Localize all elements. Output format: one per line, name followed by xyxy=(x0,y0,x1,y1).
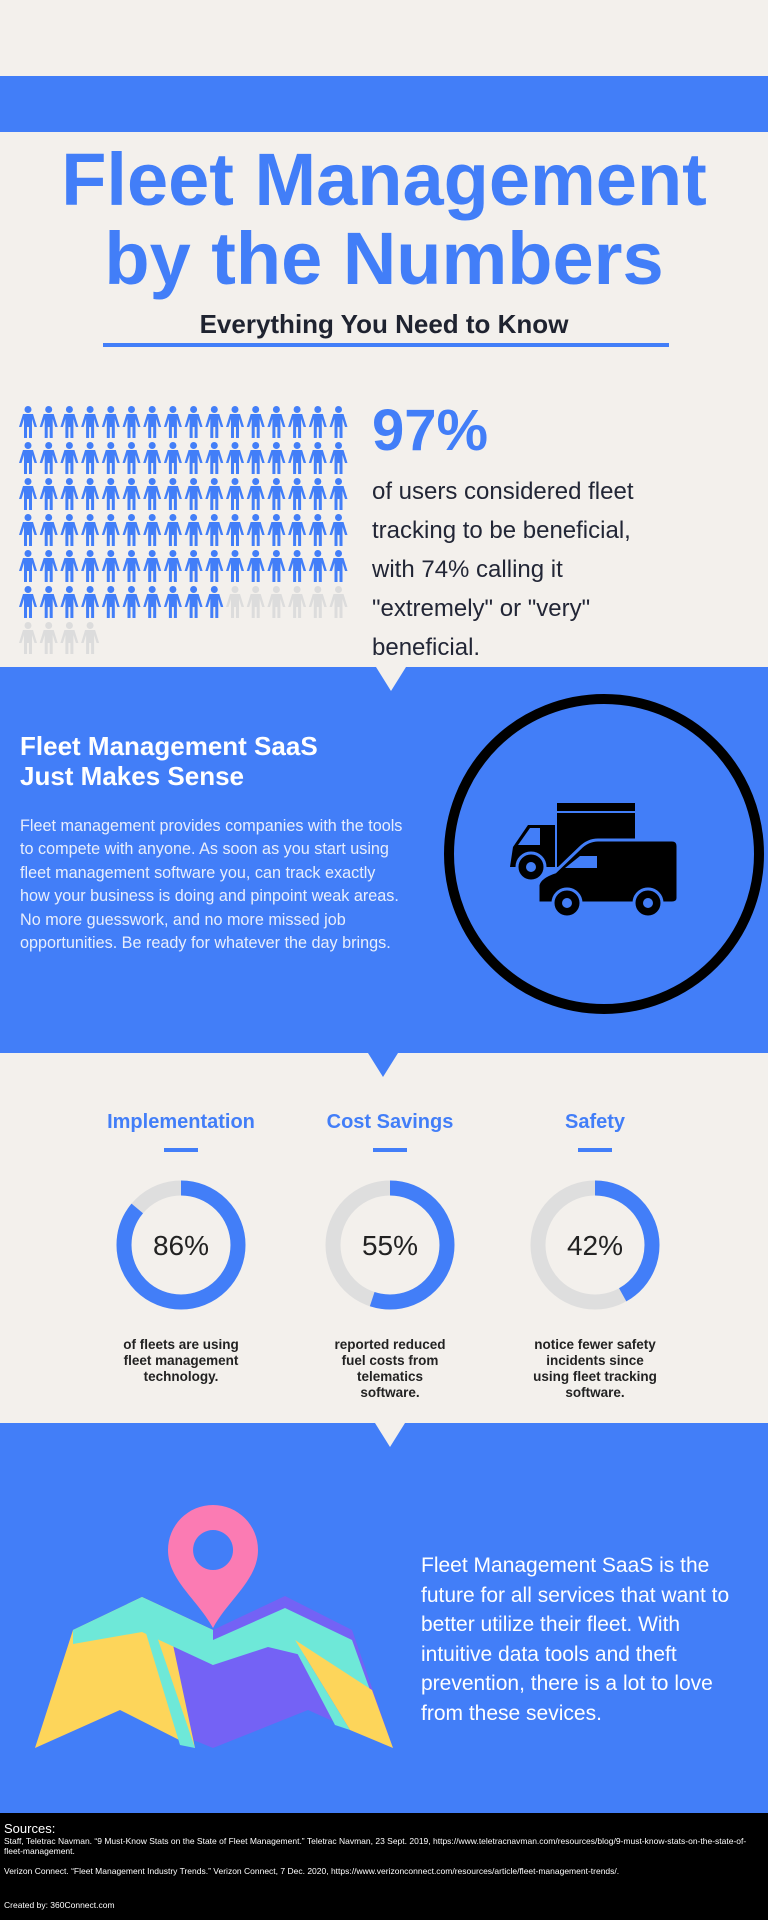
stat: implementation: Implementation xyxy=(107,1111,255,1133)
notch xyxy=(375,1423,405,1447)
subtitle: Everything You Need to Know xyxy=(200,309,568,339)
title: by the Numbers xyxy=(104,217,664,300)
stat: 97%: of users considered fleet xyxy=(372,478,633,505)
footer: sources: Sources: xyxy=(4,1821,55,1836)
stat: safety: 42% xyxy=(567,1230,623,1261)
text block xyxy=(421,1554,729,1724)
stat: 97% xyxy=(372,398,634,661)
title xyxy=(61,138,707,300)
stat: 97%: "extremely" or "very" xyxy=(372,595,590,622)
stat: implementation: 86% xyxy=(153,1230,209,1261)
stat: safety: software. xyxy=(565,1385,625,1400)
notch xyxy=(368,1053,398,1077)
paragraph: to compete with anyone. As soon as you start using xyxy=(20,840,389,858)
paragraph: No more guesswork, and no more missed job xyxy=(20,911,346,929)
footer: sources xyxy=(0,1813,768,1920)
stat: cost savings xyxy=(326,1111,454,1400)
text block: Fleet Management SaaS is the xyxy=(421,1554,709,1577)
paragraph: how your business is doing and pinpoint weak areas. xyxy=(20,887,399,905)
stat: safety: notice fewer safety xyxy=(534,1337,656,1352)
panel: future xyxy=(0,1423,768,1813)
heading xyxy=(20,731,318,791)
stat: 97%: tracking to be beneficial, xyxy=(372,517,631,544)
stat: cost savings: telematics xyxy=(357,1369,423,1384)
stat: cost savings: 55% xyxy=(362,1230,418,1261)
notch xyxy=(376,667,406,691)
footer: sources: Verizon Connect. “Fleet Management Industry Trends.” Verizon Connect, 7 Dec. 2020, https://www.verizonconnect.com/resources/article/fleet-management-trends/. xyxy=(4,1866,619,1876)
paragraph xyxy=(20,817,402,952)
underline xyxy=(103,343,669,347)
text block: from these sevices. xyxy=(421,1702,602,1724)
heading: Fleet Management SaaS xyxy=(20,731,318,761)
footer: sources: Created by: 360Connect.com xyxy=(4,1900,115,1910)
paragraph: opportunities. Be ready for whatever the day brings. xyxy=(20,934,391,952)
footer: sources: Staff, Teletrac Navman. “9 Must-Know Stats on the State of Fleet Management.” Teletrac Navman, 23 Sept. 2019, https://www.teletracnavman.com/resources/blog/9-must-know-stats-on-the-state-of-fleet-management. xyxy=(4,1836,746,1856)
text block: future for all services that want to xyxy=(421,1584,729,1606)
icon: trucks in circle xyxy=(444,694,764,1014)
icon: map with pin xyxy=(35,1505,393,1748)
text block: intuitive data tools and theft xyxy=(421,1642,677,1666)
panel: stats xyxy=(107,1053,660,1400)
text block: prevention, there is a lot to love xyxy=(421,1672,713,1695)
heading: Just Makes Sense xyxy=(20,761,244,791)
paragraph: Fleet management provides companies with the tools xyxy=(20,817,402,835)
stat: 97%: with 74% calling it xyxy=(372,556,563,583)
stat: safety: incidents since xyxy=(546,1353,644,1368)
stat: implementation: of fleets are using xyxy=(123,1337,239,1352)
top band xyxy=(0,76,768,132)
people chart xyxy=(19,406,348,654)
stat: safety xyxy=(530,1111,660,1400)
panel: SaaS makes sense xyxy=(0,667,768,1053)
paragraph: fleet management software you, can track exactly xyxy=(20,864,375,882)
stat: implementation: fleet management xyxy=(124,1353,238,1368)
stat: cost savings: Cost Savings xyxy=(327,1111,453,1133)
text block: better utilize their fleet. With xyxy=(421,1613,680,1636)
title: Fleet Management xyxy=(61,138,707,221)
stat: implementation xyxy=(107,1111,255,1384)
stat: safety: using fleet tracking xyxy=(533,1369,657,1384)
stat: cost savings: software. xyxy=(360,1385,420,1400)
stat: cost savings: fuel costs from xyxy=(342,1353,438,1368)
stat: 97%: 97% xyxy=(372,398,488,463)
stat: implementation: technology. xyxy=(144,1369,218,1384)
stat: 97%: beneficial. xyxy=(372,634,480,661)
stat: safety: Safety xyxy=(565,1111,625,1133)
stat: cost savings: reported reduced xyxy=(334,1337,446,1352)
